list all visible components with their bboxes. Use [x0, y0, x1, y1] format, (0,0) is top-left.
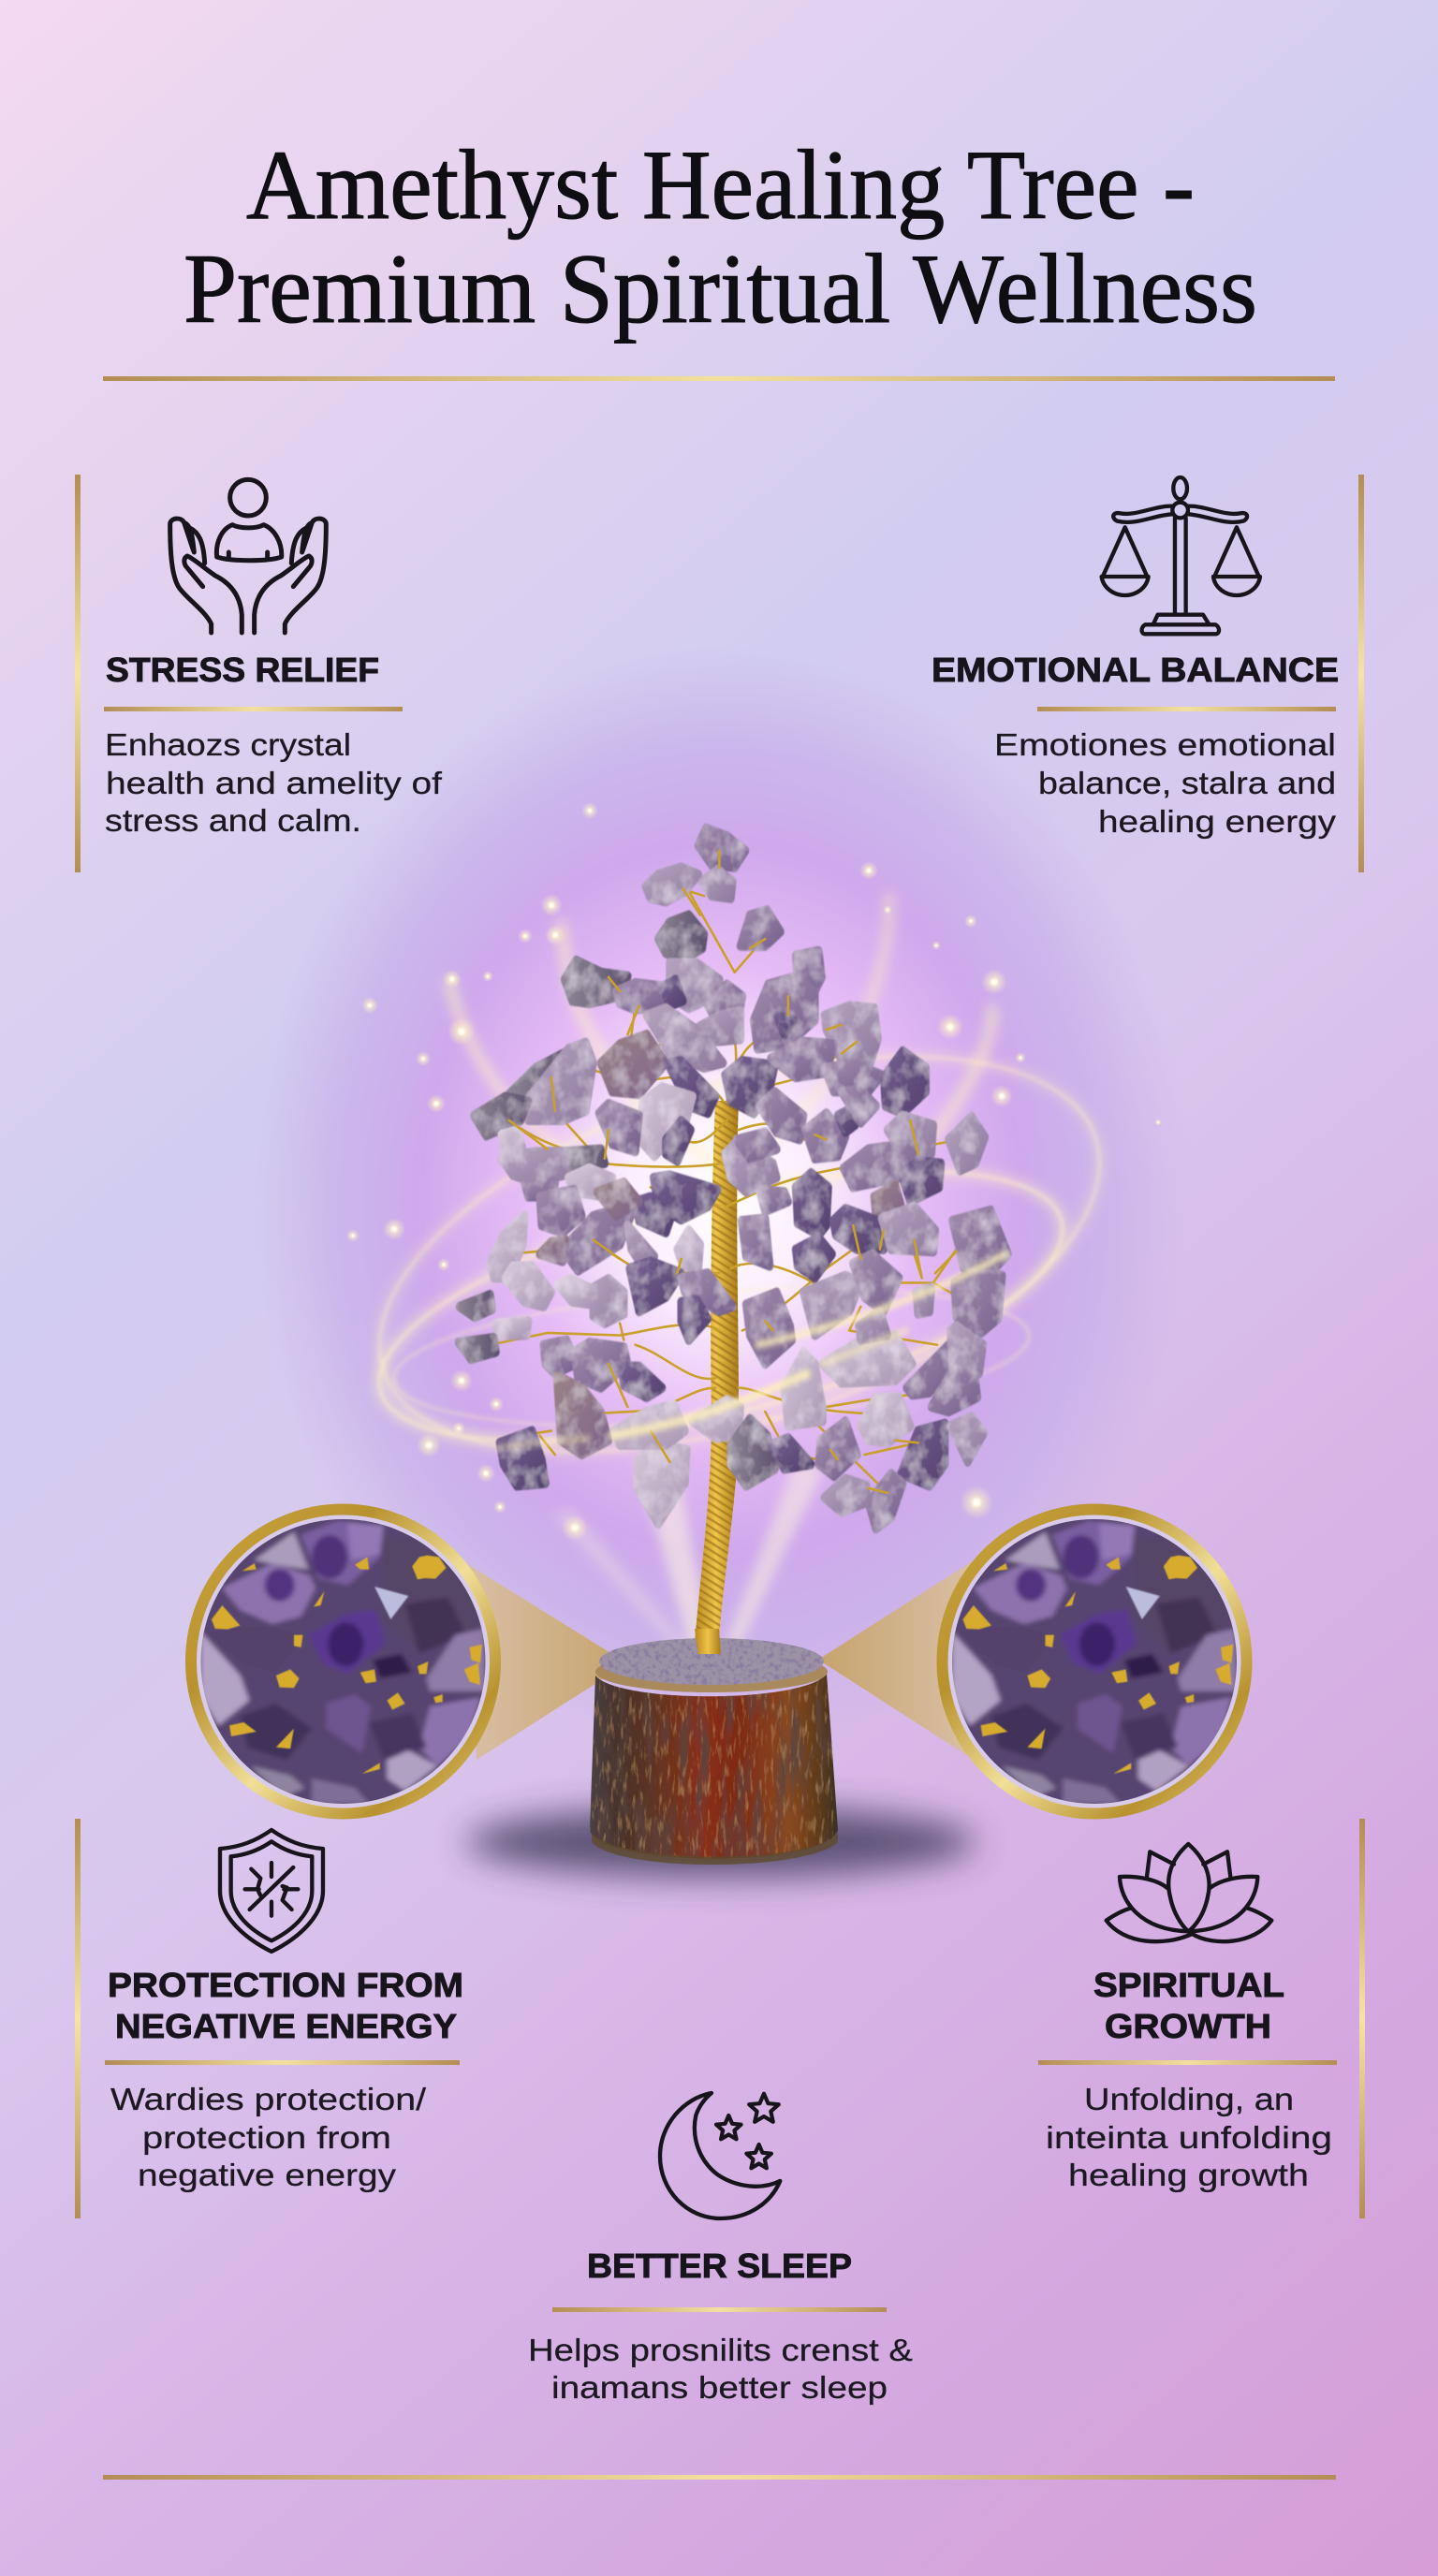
tree: wooden base with crystal chips: [590, 1629, 838, 1865]
text: better sleep description: inamans better sleep: [551, 2370, 888, 2405]
text: protection description: Wardies protection/: [110, 2082, 427, 2116]
heading: protection from negative energy: [108, 1966, 463, 2045]
text: emotional balance description: [994, 727, 1337, 839]
callout: right magnifier cone: [818, 1560, 974, 1760]
panel: spiritual growth: [1038, 1819, 1365, 2218]
title: [183, 130, 1257, 344]
title: Amethyst Healing Tree -: [246, 130, 1195, 240]
text: better sleep description: [528, 2333, 913, 2405]
icon: sparkles: [346, 802, 1162, 1541]
callout: left magnifier cone: [466, 1563, 627, 1760]
text: spiritual growth description: Unfolding, an: [1084, 2082, 1294, 2116]
light streaks across tree: [498, 1254, 1005, 1447]
panel: better sleep: [528, 2093, 913, 2405]
panel: stress relief: [75, 475, 443, 872]
title: Premium Spiritual Wellness: [183, 234, 1257, 344]
tree: crystal branches and stones: [459, 828, 1008, 1529]
text: stress relief description: Enhaozs crystal: [105, 727, 351, 762]
icon: balance scales: [1102, 477, 1260, 634]
callout: right crystal close-up: [934, 1504, 1256, 1816]
icon: shield: [220, 1830, 323, 1952]
tree: gold trunk: [694, 1101, 739, 1654]
tree wire ticks over stones: [509, 851, 956, 1493]
glow behind tree: [253, 646, 1189, 1750]
text: spiritual growth description: inteinta unfolding: [1046, 2120, 1332, 2155]
panel: protection from negative energy: [75, 1819, 463, 2218]
text: emotional balance description: balance, stalra and: [1038, 766, 1336, 800]
tree branches: [490, 891, 979, 1493]
heading: emotional balance: EMOTIONAL BALANCE: [932, 651, 1339, 689]
heading: spiritual growth: GROWTH: [1105, 2007, 1271, 2045]
tree stones: [459, 828, 1008, 1529]
icon: moon and stars: [660, 2093, 780, 2218]
heading: protection from negative energy: PROTECTION FROM: [108, 1966, 463, 2004]
base shadow: [466, 1807, 976, 1878]
text: stress relief description: health and amelity of: [106, 766, 443, 800]
text: stress relief description: stress and calm.: [105, 803, 361, 838]
text: stress relief description: [105, 727, 443, 838]
text: better sleep description: Helps prosnilits crenst &: [528, 2333, 913, 2367]
text: protection description: negative energy: [138, 2158, 397, 2192]
heading: spiritual growth: SPIRITUAL: [1093, 1966, 1284, 2004]
callout: left crystal close-up: [183, 1504, 506, 1816]
heading: better sleep: BETTER SLEEP: [587, 2247, 852, 2285]
heading: protection from negative energy: NEGATIVE ENERGY: [115, 2007, 457, 2045]
icon: lotus: [1107, 1844, 1271, 1941]
text: protection description: protection from: [142, 2120, 391, 2155]
text: spiritual growth description: [1046, 2082, 1332, 2192]
icon: hands holding person: [170, 479, 326, 633]
panel: emotional balance: [932, 475, 1364, 872]
text: emotional balance description: healing energy: [1098, 804, 1337, 839]
text: emotional balance description: Emotiones emotional: [994, 727, 1336, 762]
text: protection description: [110, 2082, 427, 2192]
heading: spiritual growth: [1093, 1966, 1284, 2045]
text: spiritual growth description: healing growth: [1068, 2158, 1309, 2192]
heading: stress relief: STRESS RELIEF: [106, 651, 379, 689]
